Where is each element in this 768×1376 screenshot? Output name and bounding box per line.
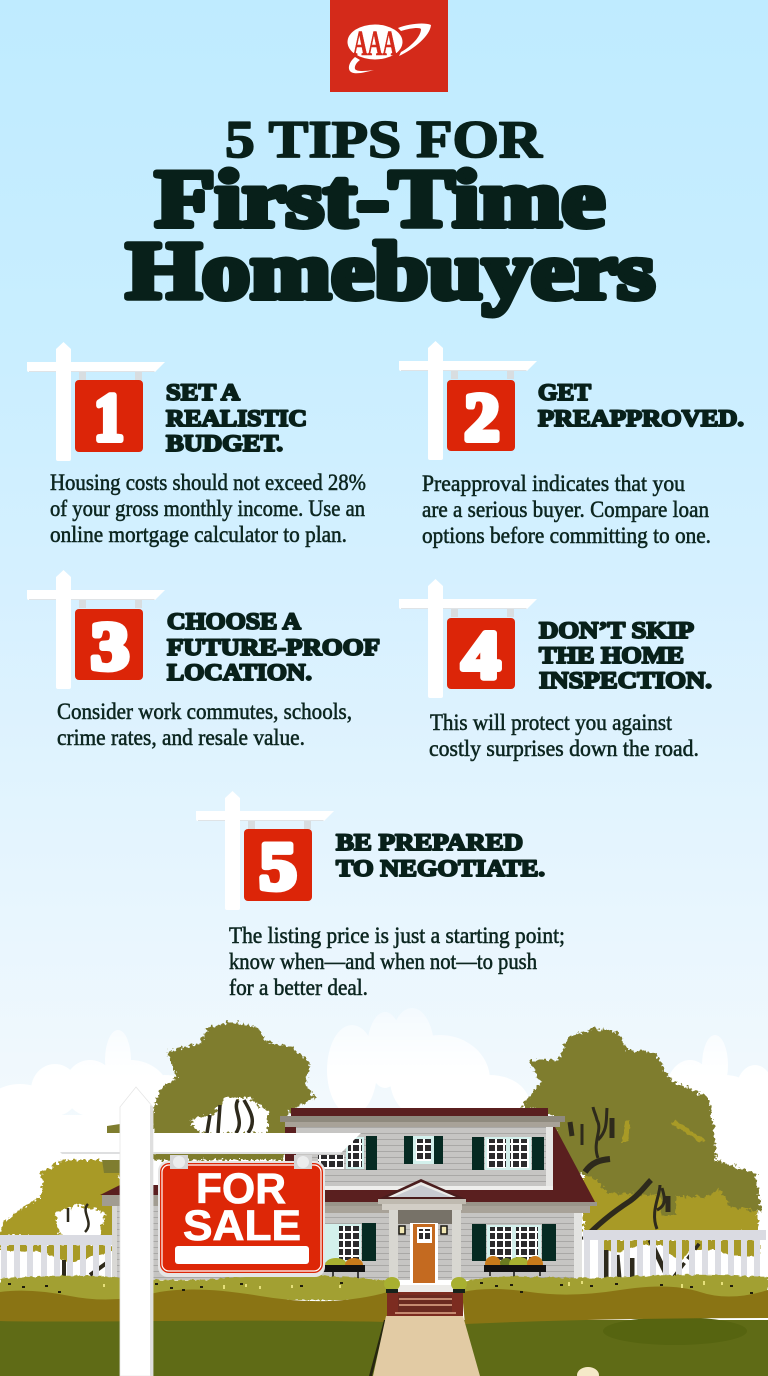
crown details [622,1120,705,1215]
tip 2 panel [399,341,744,548]
body 2: Preapproval indicates that you [422,471,685,496]
tree patch behind post [102,1124,120,1173]
fence: left [0,1235,112,1278]
body 5: know when—and when not—to push [229,949,537,974]
clouds [0,1021,768,1206]
sign post [120,1087,153,1376]
heading 5: TO NEGOTIATE. [336,856,545,881]
sign 2: 2 [464,379,500,455]
logo: AAA [330,0,448,92]
body 3: Consider work commutes, schools, [57,699,352,724]
tree: left small [0,1160,125,1236]
tree: right lower foliage [583,1150,758,1232]
body 1: online mortgage calculator to plan. [50,522,347,547]
logo: AAA: AAA [353,23,397,63]
sign 5 [196,791,334,910]
sign 5: 5 [260,828,296,904]
heading 4: DON’T SKIP [539,618,694,643]
lower roof trim [325,1202,597,1206]
title: 5 TIPS FOR [225,111,543,169]
lower windows [325,1223,556,1262]
upper windows [318,1136,544,1170]
upper wall [296,1127,553,1190]
body 1: Housing costs should not exceed 28% [50,470,366,495]
body 3: crime rates, and resale value. [57,725,305,750]
body 5: for a better deal. [229,975,368,1000]
hanging board [158,1155,325,1277]
for sale sign [57,1087,361,1376]
front door [410,1223,438,1285]
blank bar [175,1246,309,1264]
title [126,111,655,316]
sign 3 [27,570,165,689]
upper roof [291,1108,548,1116]
porch [378,1179,466,1292]
tip 3 panel [27,570,380,750]
heading 2: GET [538,380,591,405]
heading 4: INSPECTION. [539,668,712,693]
left wing roof [100,1185,330,1195]
sign 1 [27,342,165,461]
sign 2 [399,341,537,460]
tree branches right [570,1107,668,1240]
sign 4 [399,579,537,698]
tree: right crown [521,1028,762,1212]
lower wall [112,1206,582,1280]
lawn [0,1320,768,1376]
sign 1: 1 [94,379,124,455]
heading 4: THE HOME [539,643,684,668]
tip 4 panel [399,579,712,761]
heading 1: BUDGET. [166,431,283,456]
lanterns [399,1226,447,1234]
heading 2: PREAPPROVED. [538,406,744,431]
house [100,1108,597,1292]
body 4: costly surprises down the road. [429,736,699,761]
heading 3: FUTURE-PROOF [167,635,380,660]
front steps [387,1292,463,1316]
walkway [369,1316,480,1376]
title: First-Time [155,153,605,244]
hedge right [462,1275,768,1324]
body 2: options before committing to one. [422,523,711,548]
hooks [170,1155,312,1169]
lawn shadow [603,1317,747,1345]
hanging board: SALE [183,1202,301,1250]
sign 4: 4 [462,617,500,693]
fence: right [583,1230,766,1278]
sign arm [57,1133,361,1154]
heading 5: BE PREPARED [336,830,523,855]
mansard roof [285,1127,595,1202]
illustration: house scene [0,1022,768,1376]
hedge left [0,1275,388,1322]
heading 3: CHOOSE A [167,609,301,634]
body 5: The listing price is just a starting point; [229,923,565,948]
heading 1: REALISTIC [166,406,307,431]
title: Homebuyers [126,225,655,316]
heading 1: SET A [166,380,240,405]
flower boxes [323,1256,546,1279]
tip 1 panel [27,342,366,547]
tip 5 panel [196,791,565,1000]
bushes by steps [384,1277,467,1293]
body 2: are a serious buyer. Compare loan [422,497,709,522]
body 4: This will protect you against [430,710,673,735]
for sale text: FOR [196,1165,286,1213]
heading 3: LOCATION. [167,660,312,685]
tree: left large [153,1022,315,1160]
lawn highlight [577,1367,599,1376]
tree gaps and branches left [55,1098,268,1236]
body 1: of your gross monthly income. Use an [50,496,365,521]
sign 3: 3 [91,608,129,684]
